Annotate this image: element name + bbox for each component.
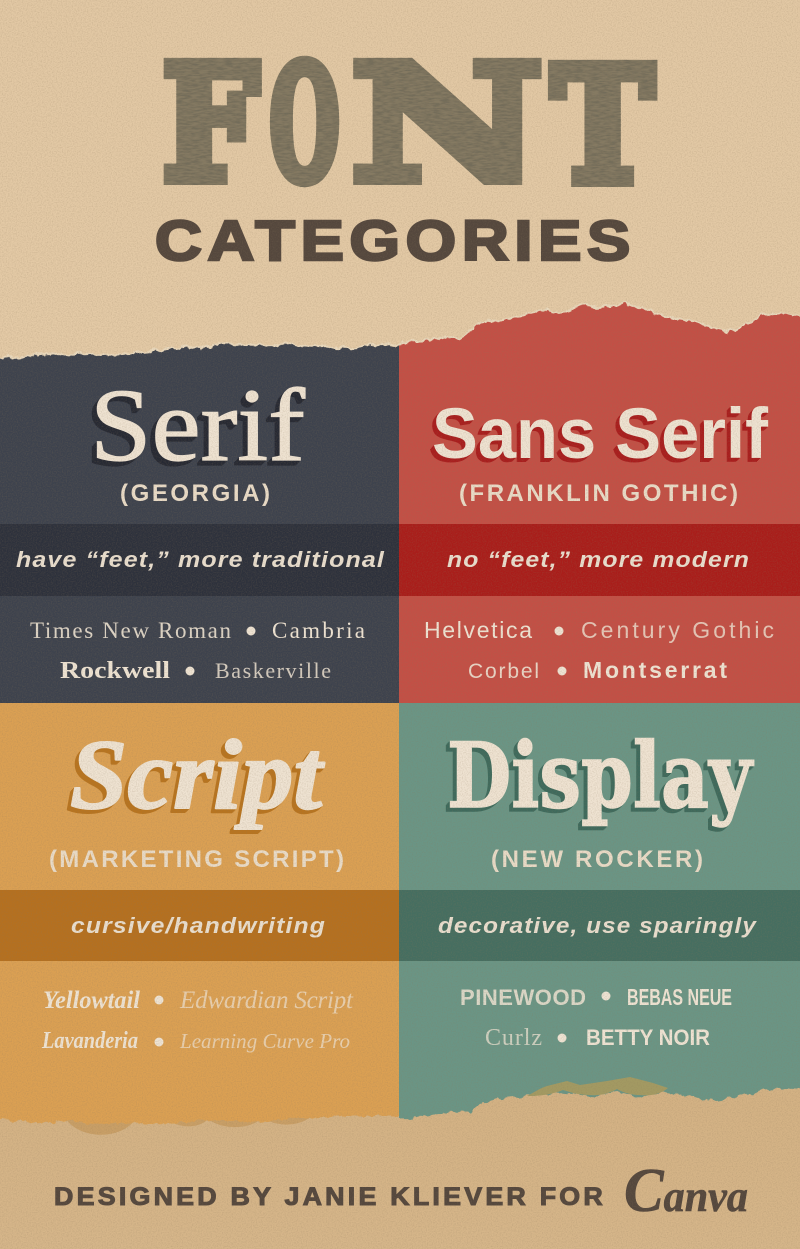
panel background: sans serif bbox=[390, 304, 800, 710]
font examples: serif: Times New Roman bbox=[30, 618, 232, 643]
panel background: script bbox=[0, 695, 410, 1124]
font examples: script: Edwardian Script bbox=[179, 987, 354, 1014]
band: sans serif description bbox=[399, 524, 800, 596]
footer credit bbox=[54, 1157, 748, 1225]
tagline: sans serif: no “feet,” more modern bbox=[447, 547, 750, 572]
font examples: display: BETTY NOIR bbox=[586, 1025, 710, 1050]
font examples: sans serif: Century Gothic bbox=[581, 617, 774, 643]
title word: FONT: F bbox=[162, 32, 258, 217]
font examples: display: Curlz bbox=[485, 1025, 542, 1051]
font examples: display: BEBAS NEUE bbox=[627, 984, 732, 1010]
torn paper light fringe bbox=[0, 303, 800, 360]
font examples: serif bbox=[30, 618, 365, 684]
title word: FONT: N bbox=[352, 32, 542, 217]
title word: FONT bbox=[162, 32, 654, 219]
band: script description bbox=[0, 890, 400, 961]
font examples: script: Lavanderia bbox=[41, 1028, 138, 1054]
panel: script bbox=[0, 695, 410, 1124]
panel background: serif bbox=[0, 344, 410, 710]
band: display description bbox=[399, 890, 800, 961]
font examples: script: Yellowtail bbox=[43, 987, 140, 1014]
title word: CATEGORIES: CATEGORIES bbox=[155, 209, 636, 273]
font examples: sans serif: Corbel bbox=[468, 660, 539, 683]
subtitle: New Rocker: (NEW ROCKER) bbox=[491, 846, 703, 873]
subtitle: Georgia: (GEORGIA) bbox=[120, 480, 270, 507]
title word: FONT: O bbox=[270, 32, 340, 217]
font examples: serif: Rockwell bbox=[60, 658, 170, 684]
panel: serif bbox=[0, 344, 410, 710]
tagline: display: decorative, use sparingly bbox=[438, 913, 758, 938]
torn shadow scallops under the script panel bbox=[65, 1116, 312, 1135]
title word: FONT: T bbox=[552, 34, 654, 219]
title bbox=[155, 32, 654, 273]
font examples: script: Learning Curve Pro bbox=[179, 1029, 350, 1053]
tagline: serif: have “feet,” more traditional bbox=[16, 547, 385, 572]
heading: Serif: Serif bbox=[90, 368, 305, 483]
font examples: display: PINEWOOD bbox=[460, 985, 586, 1010]
footer text: DESIGNED BY JANIE KLIEVER FOR bbox=[54, 1183, 606, 1211]
band: serif description bbox=[0, 524, 400, 596]
font examples: sans serif: Helvetica bbox=[424, 617, 532, 643]
panel: display bbox=[390, 695, 800, 1120]
font examples: script bbox=[41, 987, 354, 1054]
panel background: display bbox=[390, 695, 800, 1120]
olive tear stain above the paper edge bbox=[527, 1077, 668, 1096]
font examples: sans serif: Montserrat bbox=[583, 657, 727, 683]
font examples: serif: Baskerville bbox=[215, 658, 331, 683]
subtitle: Franklin Gothic: (FRANKLIN GOTHIC) bbox=[459, 480, 738, 507]
logo: Canva: Canva bbox=[624, 1157, 748, 1225]
font examples: sans serif bbox=[424, 617, 774, 683]
tagline: script: cursive/handwriting bbox=[71, 913, 326, 938]
font examples: serif: Cambria bbox=[272, 618, 365, 643]
heading: Sans Serif: Sans Serif bbox=[432, 395, 768, 474]
font examples: display bbox=[460, 984, 732, 1051]
panel: sans serif bbox=[390, 304, 800, 710]
heading: Script: Script bbox=[70, 719, 325, 830]
subtitle: Marketing Script: (MARKETING SCRIPT) bbox=[49, 846, 344, 873]
